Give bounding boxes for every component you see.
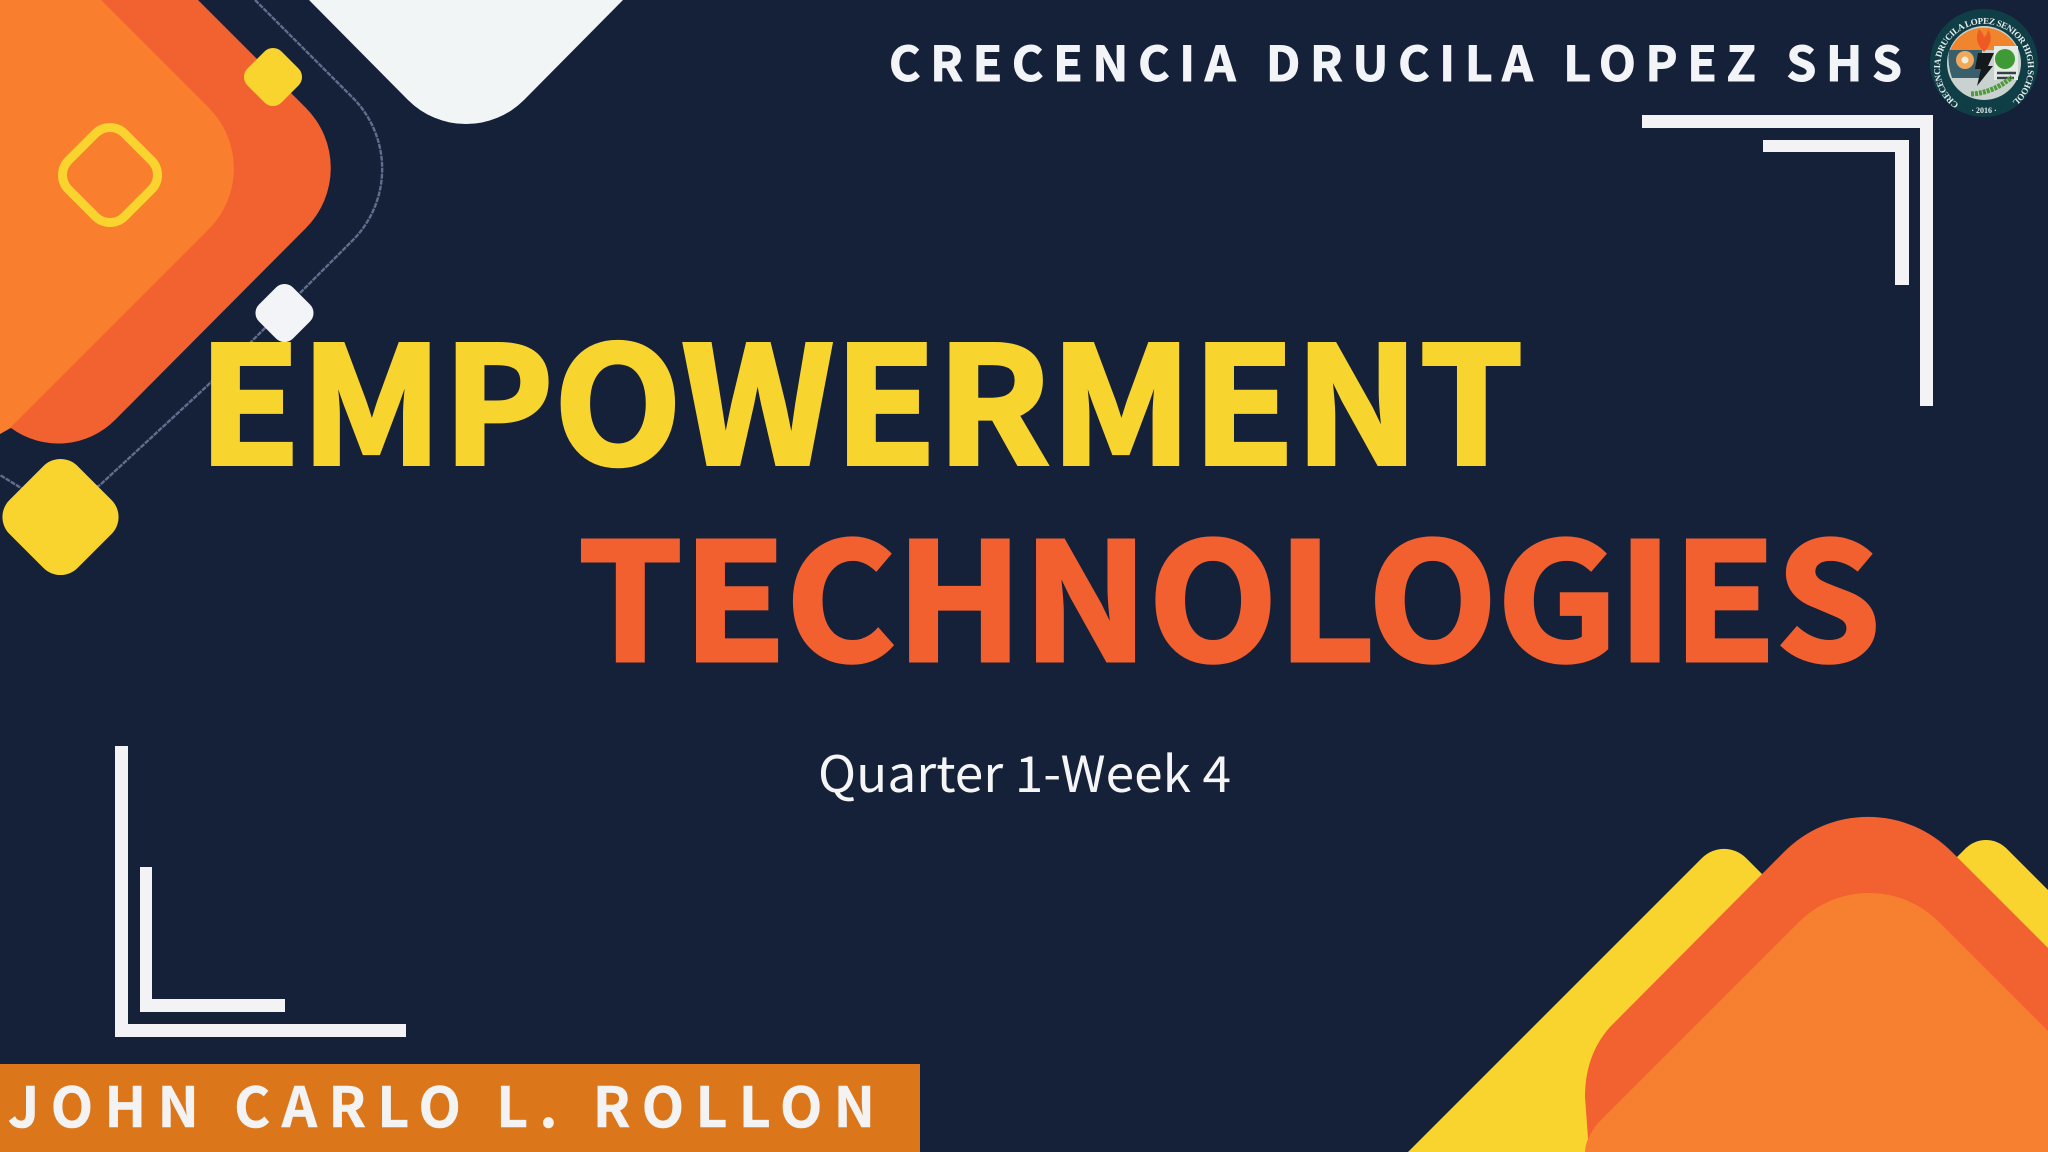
bottom-right decoration: layered rounded shapes: [1408, 817, 2048, 1152]
top-left decoration: orange rounded diamonds: [0, 0, 331, 444]
icon: school seal: CRECENCIA DRUCILA LOPEZ SENIOR HIGH SCHOOL: [1934, 18, 2034, 108]
school name: CRECENCIA DRUCILA LOPEZ SHS: [889, 25, 1902, 95]
icon: yellow diamond outline: [62, 127, 158, 223]
top white diamond: [309, 0, 623, 124]
small yellow diamond: [244, 48, 302, 106]
icon: school seal: · 2016 ·: [1971, 106, 1997, 115]
top-right corner brackets: [1642, 115, 1933, 406]
title: EMPOWERMENT: EMPOWERMENT: [198, 276, 1524, 511]
large yellow diamond: [2, 459, 119, 575]
bottom-left corner brackets: [115, 746, 406, 1037]
author banner: JOHN CARLO L. ROLLON: [8, 1063, 875, 1143]
title: TECHNOLOGIES: TECHNOLOGIES: [578, 472, 1880, 708]
subtitle: Quarter 1-Week 4: [818, 735, 1231, 807]
small white diamond: [255, 284, 314, 342]
